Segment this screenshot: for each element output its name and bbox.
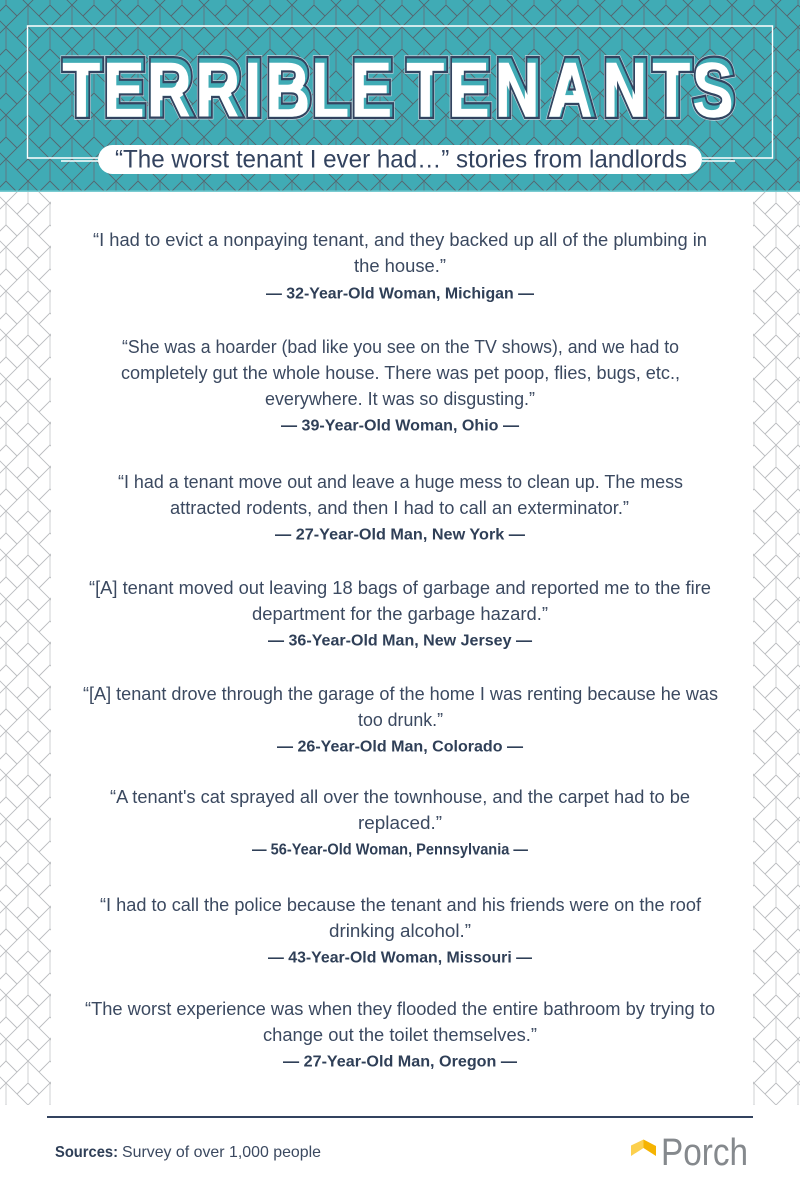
quote 7: — 43-Year-Old Woman, Missouri —	[268, 950, 532, 966]
quote 3	[118, 472, 683, 544]
title: TERRIBLE TENANTS	[61, 48, 732, 137]
quote 6: — 56-Year-Old Woman, Pennsylvania —	[252, 842, 528, 858]
quote 5: — 26-Year-Old Man, Colorado —	[277, 738, 523, 756]
quote 6: “A tenant's cat sprayed all over the townhouse, and the carpet had to be	[110, 787, 690, 807]
sources: Sources:	[55, 1144, 118, 1161]
quote 8: change out the toilet themselves.”	[263, 1025, 537, 1045]
quote 1: — 32-Year-Old Woman, Michigan —	[266, 286, 534, 302]
quote 3: “I had a tenant move out and leave a huge mess to clean up. The mess	[118, 472, 683, 492]
quote 6: replaced.”	[358, 813, 442, 833]
quote 1: “I had to evict a nonpaying tenant, and they backed up all of the plumbing in	[93, 230, 707, 250]
quote 1: the house.”	[354, 256, 446, 276]
quote 3: attracted rodents, and then I had to call an exterminator.”	[170, 498, 629, 518]
quote 7: drinking alcohol.”	[329, 921, 471, 941]
quote 4: department for the garbage hazard.”	[252, 604, 548, 624]
header banner	[0, 0, 800, 192]
quote 8	[85, 999, 715, 1070]
quote 5: too drunk.”	[358, 710, 443, 730]
quote 7	[100, 895, 702, 966]
quote 1	[93, 230, 707, 302]
quote 4: — 36-Year-Old Man, New Jersey —	[268, 632, 532, 650]
logo: Porch	[631, 1132, 748, 1174]
quote 8: “The worst experience was when they flooded the entire bathroom by trying to	[85, 999, 715, 1019]
side pattern: right	[753, 192, 800, 1105]
subtitle pill: “The worst tenant I ever had…” stories from landlords	[115, 146, 687, 174]
quote 2: — 39-Year-Old Woman, Ohio —	[281, 418, 519, 434]
quote 4	[89, 578, 711, 650]
icon: roof chevron	[631, 1140, 656, 1156]
quote 6	[110, 787, 690, 858]
quote 2	[121, 337, 680, 434]
title: TERRIBLE TENANTS	[63, 44, 735, 133]
quote 2: “She was a hoarder (bad like you see on the TV shows), and we had to	[122, 337, 679, 357]
quote 2: completely gut the whole house. There was pet poop, flies, bugs, etc.,	[121, 363, 680, 383]
quote 4: “[A] tenant moved out leaving 18 bags of garbage and reported me to the fire	[89, 578, 711, 598]
title: TERRIBLE TENANTS	[63, 44, 735, 133]
logo: Porch: Porch	[661, 1132, 748, 1174]
quote 8: — 27-Year-Old Man, Oregon —	[283, 1054, 517, 1070]
quote 2: everywhere. It was so disgusting.”	[265, 389, 535, 409]
side pattern: left	[0, 192, 51, 1105]
quote 3: — 27-Year-Old Man, New York —	[275, 526, 525, 544]
quote 5	[83, 684, 718, 756]
header frame	[28, 26, 772, 161]
quote 7: “I had to call the police because the tenant and his friends were on the roof	[100, 895, 702, 915]
quote 5: “[A] tenant drove through the garage of the home I was renting because he was	[83, 684, 718, 704]
title: TERRIBLE TENANTS	[63, 44, 735, 133]
sources: Survey of over 1,000 people	[122, 1144, 321, 1161]
